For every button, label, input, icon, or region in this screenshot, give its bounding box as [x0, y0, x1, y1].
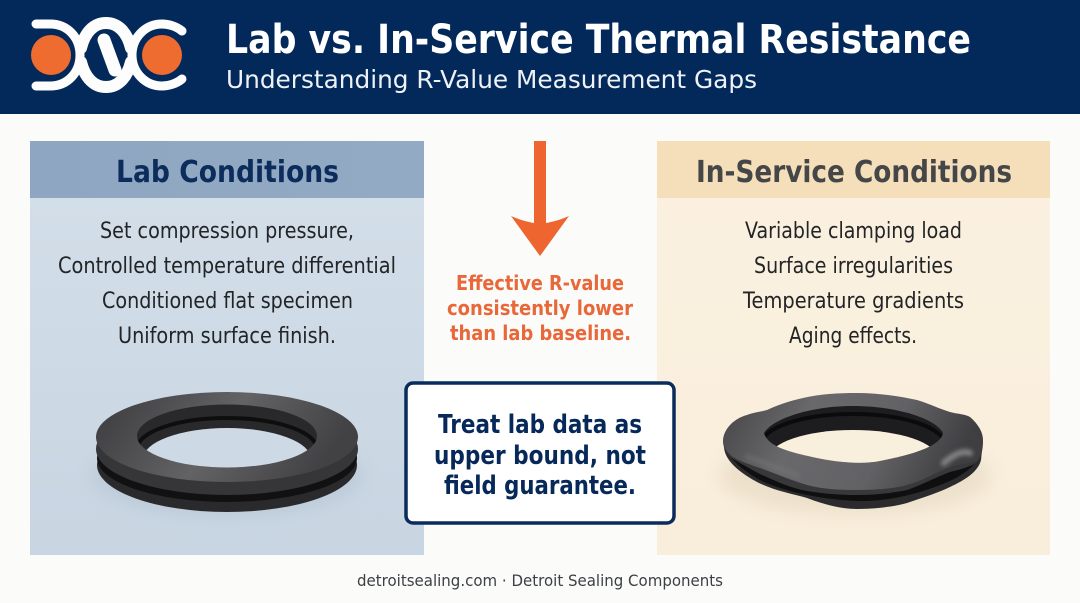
icon: flat gasket	[91, 392, 363, 516]
arrow: down to lower R-value	[511, 141, 569, 256]
subtitle: Understanding R-Value Measurement Gaps	[226, 65, 757, 94]
header band	[0, 0, 1080, 114]
lab conditions list: Controlled temperature differential	[58, 254, 396, 279]
lab conditions list	[58, 219, 396, 349]
in-service conditions list: Aging effects.	[789, 324, 917, 349]
callout: effective R-value: than lab baseline.	[450, 321, 631, 345]
footer: detroitsealing.com · Detroit Sealing Components	[357, 571, 723, 590]
logo: DSC mark	[31, 23, 182, 87]
callout: effective R-value: consistently lower	[447, 296, 633, 320]
lab conditions list: Conditioned flat specimen	[102, 289, 353, 314]
lab heading band	[30, 141, 424, 198]
in-service heading band	[657, 141, 1050, 198]
callout box: takeaway: field guarantee.	[444, 471, 636, 501]
in-service conditions list: Temperature gradients	[742, 289, 964, 314]
in-service conditions list	[742, 219, 964, 349]
callout box: takeaway: Treat lab data as	[438, 410, 642, 440]
callout box: takeaway	[406, 383, 674, 523]
callout: effective R-value	[447, 271, 633, 345]
icon: warped gasket	[719, 393, 991, 514]
panel: lab conditions	[30, 141, 424, 555]
lab heading band: Lab Conditions	[116, 155, 339, 190]
panel: in-service conditions	[657, 141, 1050, 555]
callout box: takeaway: upper bound, not	[434, 441, 646, 471]
lab conditions list: Uniform surface finish.	[118, 324, 336, 349]
callout: effective R-value: Effective R-value	[456, 271, 624, 295]
in-service conditions list: Surface irregularities	[754, 254, 953, 279]
lab conditions list: Set compression pressure,	[100, 219, 354, 244]
in-service heading band: In-Service Conditions	[696, 155, 1012, 190]
title: Lab vs. In-Service Thermal Resistance	[226, 17, 971, 63]
in-service conditions list: Variable clamping load	[745, 219, 962, 244]
